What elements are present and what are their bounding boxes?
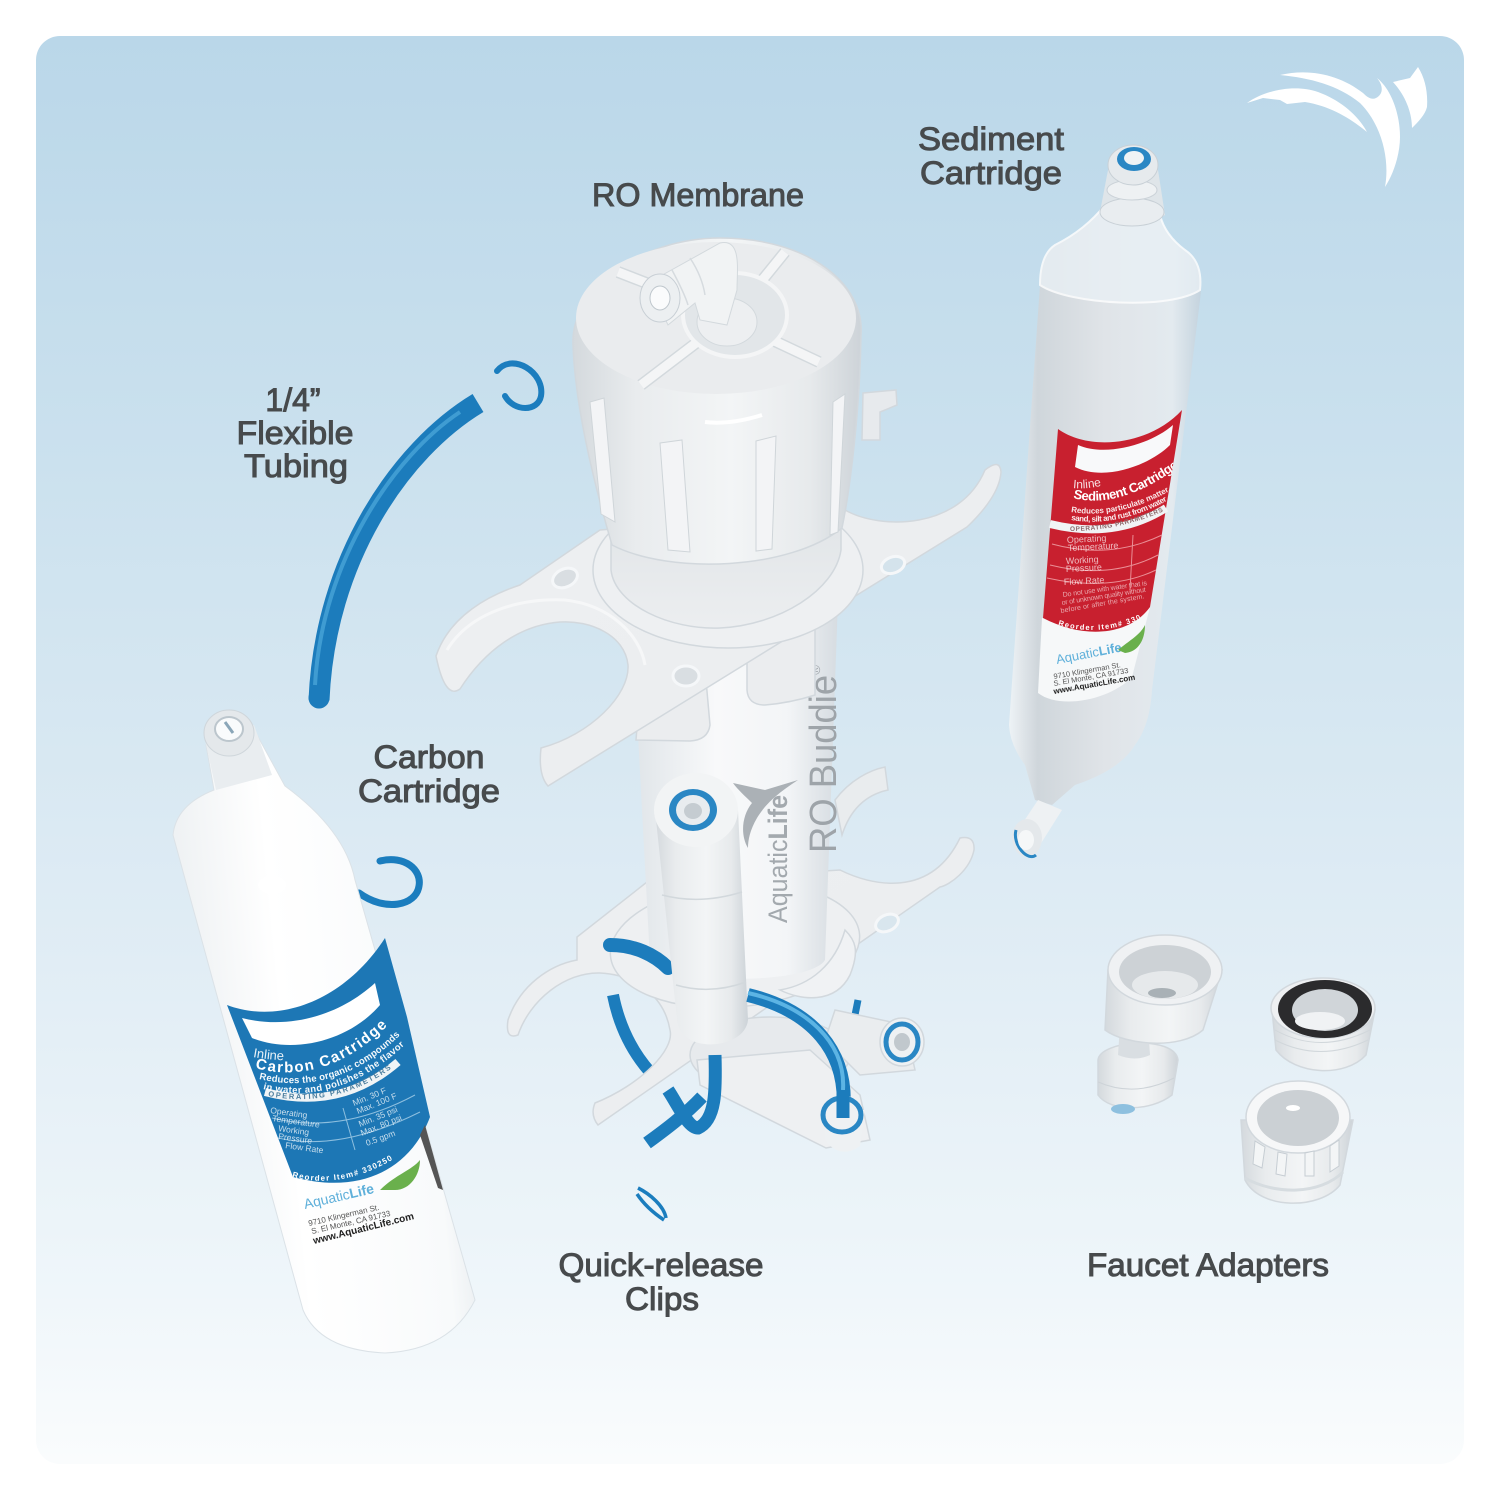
bottom elbow fitting xyxy=(1012,800,1062,857)
label window xyxy=(242,983,380,1045)
upper clamp tabs xyxy=(636,620,815,741)
flexible tubing xyxy=(308,403,478,708)
lower clamp mounting hole xyxy=(873,911,901,935)
heading: Faucet Adapters: Faucet Adapters xyxy=(1087,1247,1329,1283)
upper clamp ring xyxy=(593,492,863,648)
label text: Operating xyxy=(270,1105,308,1120)
cap ribs xyxy=(590,394,845,552)
lower clamp xyxy=(507,838,974,1125)
Aquatic Life brand text xyxy=(302,1160,420,1247)
heading: Flexible Tubing: 1/4” xyxy=(265,382,321,418)
white lower label xyxy=(1038,607,1150,702)
top fitting xyxy=(1100,145,1165,226)
Aquatic Life brand text: AquaticLife xyxy=(302,1180,376,1212)
label text: Reorder Item# 330250 xyxy=(292,1156,392,1181)
back tab xyxy=(862,390,897,440)
heading: Sediment Cartridge xyxy=(918,121,1064,191)
label text: Inline xyxy=(254,1048,284,1060)
sediment cartridge xyxy=(1009,144,1202,858)
neck fitting xyxy=(204,710,272,790)
cap top face xyxy=(576,242,856,394)
upper clamp xyxy=(436,464,1001,786)
label text: 0.5 gpm xyxy=(364,1128,397,1148)
heading: Sediment Cartridge: Cartridge xyxy=(920,155,1062,191)
label text: Carbon Cartridge xyxy=(256,1022,386,1072)
tube: main blue loop xyxy=(748,993,844,1115)
heading: Sediment Cartridge: Sediment xyxy=(918,121,1064,157)
label text: Pressure xyxy=(278,1131,313,1146)
column brand logo xyxy=(733,780,798,848)
label stripe xyxy=(265,1062,398,1098)
label text: Min. 35 psi xyxy=(357,1104,399,1129)
Aquatic Life brand text: 9710 Klingerman St. xyxy=(307,1203,380,1228)
cap center boss xyxy=(683,273,787,357)
bottom right fitting xyxy=(880,1018,924,1066)
clip: below membrane xyxy=(637,1188,666,1220)
lower clamp back arc xyxy=(835,767,888,835)
heading: RO Membrane: RO Membrane xyxy=(592,177,804,213)
faucet adapters xyxy=(1098,935,1375,1203)
label text: Temperature xyxy=(272,1113,321,1130)
label text xyxy=(1058,462,1174,630)
label text: Reduces particulate matter, xyxy=(1072,488,1169,514)
icon: brand logo xyxy=(1247,67,1427,187)
clip: near carbon cartridge xyxy=(359,860,419,905)
tube: short upper segment xyxy=(610,945,668,968)
tube: behind lower clamp xyxy=(613,995,858,1072)
heading: Quick-release Clips xyxy=(558,1247,764,1317)
label text: Sediment Cartridge xyxy=(1074,462,1174,501)
clear top dome xyxy=(1040,205,1200,303)
column text: RO Buddie: ® xyxy=(807,664,823,675)
Aquatic Life brand text xyxy=(1052,625,1145,696)
Aquatic Life brand text: S. El Monte, CA 91733 xyxy=(1053,666,1129,688)
label text: Min. 30 F xyxy=(351,1085,388,1108)
label text: Flow Rate xyxy=(1064,575,1105,587)
cartridge body xyxy=(173,735,475,1353)
barcode xyxy=(420,1125,443,1190)
cartridge highlight xyxy=(258,876,286,894)
label text: Reduces the organic compounds xyxy=(260,1032,400,1084)
heading: Quick-release Clips: Quick-release xyxy=(558,1247,764,1283)
heading: Flexible Tubing: Tubing xyxy=(244,448,348,484)
heading: Flexible Tubing xyxy=(236,382,354,484)
table lines xyxy=(1047,535,1162,590)
label window xyxy=(1075,425,1173,473)
membrane cap xyxy=(573,238,861,564)
label text: Max. 100 F xyxy=(355,1091,398,1116)
label text: Do not use with water that is xyxy=(1062,580,1148,599)
label text: or of unknown quality without xyxy=(1061,587,1146,607)
bottom front fitting xyxy=(821,1090,865,1152)
label text: Max. 80 psi xyxy=(359,1112,403,1138)
heading: Quick-release Clips: Clips xyxy=(625,1281,699,1317)
membrane column xyxy=(634,600,838,979)
cap cross ribs xyxy=(618,252,819,385)
label text: OPERATING PARAMETERS xyxy=(268,1065,390,1100)
Aquatic Life brand text: AquaticLife xyxy=(1055,640,1123,667)
adapter: gasket ring xyxy=(1271,978,1375,1071)
upper clamp holes xyxy=(549,553,907,686)
label text: OPERATING PARAMETERS xyxy=(1070,508,1163,531)
membrane lower band xyxy=(611,495,841,628)
blue label xyxy=(227,938,430,1183)
label text: Working xyxy=(278,1123,310,1137)
adapter: threaded collar xyxy=(1241,1081,1353,1203)
flow restrictor cylinder xyxy=(654,773,748,1044)
tube: lower blue loop xyxy=(647,1055,715,1143)
Aquatic Life brand text: 9710 Klingerman St. xyxy=(1053,660,1121,681)
label text: Temperature xyxy=(1068,540,1119,553)
Aquatic Life brand text: www.AquaticLife.com xyxy=(1052,673,1136,696)
heading: Carbon Cartridge: Cartridge xyxy=(358,773,500,809)
heading: Flexible Tubing: Flexible xyxy=(236,415,354,451)
column brand text: AquaticLife xyxy=(763,795,793,923)
label text: Inline xyxy=(1074,479,1100,488)
column text: RO Buddie: RO Buddie xyxy=(803,667,845,853)
heading: Carbon Cartridge: Carbon xyxy=(374,739,484,775)
clip: near tubing xyxy=(497,363,541,408)
adapter: hose fitting xyxy=(1098,935,1222,1114)
label table lines xyxy=(272,1095,420,1150)
label text: Reorder Item# 330 xyxy=(1058,615,1140,630)
upper clamp rim highlight xyxy=(447,600,645,665)
label text: sand, silt and rust from water xyxy=(1072,497,1166,523)
heading: Carbon Cartridge xyxy=(358,739,500,809)
cartridge body xyxy=(1009,175,1201,805)
bottom manifold xyxy=(690,1010,915,1148)
Aquatic Life brand text: S. El Monte, CA 91733 xyxy=(310,1209,392,1236)
cap highlight xyxy=(705,415,762,423)
label text: in water and polishes the flavor xyxy=(264,1042,404,1094)
label text: before or after the system. xyxy=(1060,593,1145,615)
lower clamp front arc xyxy=(780,930,855,998)
label text: Pressure xyxy=(1066,562,1102,574)
red label xyxy=(1043,410,1182,632)
elbow fitting xyxy=(640,242,737,325)
white stripe xyxy=(1050,508,1166,529)
label text: Operating xyxy=(1067,533,1107,545)
RO membrane assembly xyxy=(436,238,1001,1152)
label text xyxy=(254,1022,404,1181)
label text: Flow Rate xyxy=(285,1140,324,1155)
Aquatic Life brand text: www.AquaticLife.com xyxy=(311,1211,415,1247)
carbon cartridge xyxy=(172,710,476,1354)
lower clamp ring xyxy=(605,872,865,1018)
label text: Working xyxy=(1066,554,1099,566)
